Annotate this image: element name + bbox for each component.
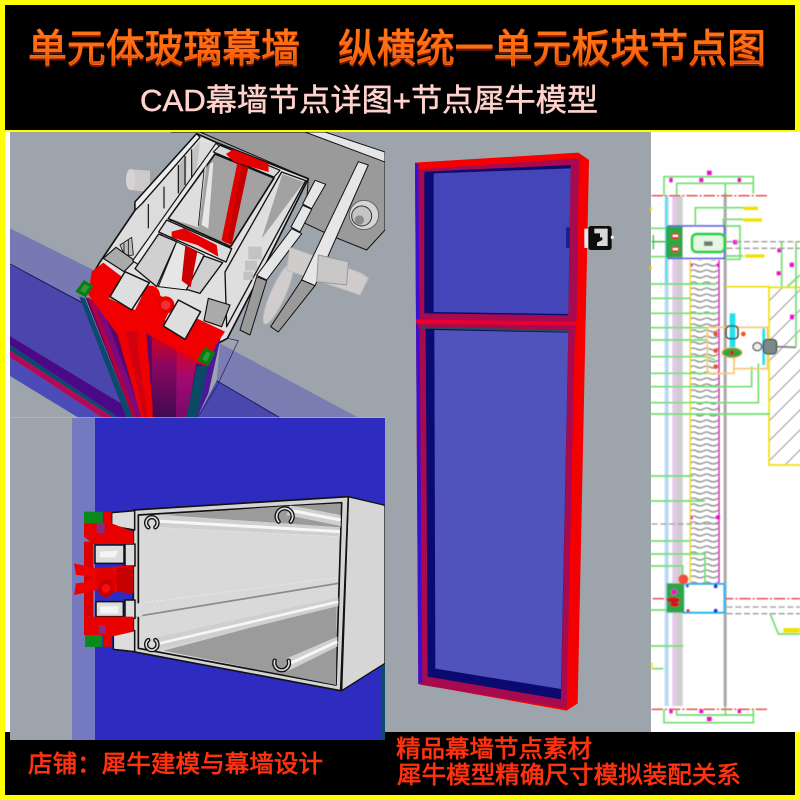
red thermal break T pieces <box>172 149 269 287</box>
wall hatch <box>726 287 800 465</box>
tagline line one: 精品幕墙节点素材 <box>396 736 592 763</box>
upper rails <box>157 505 341 537</box>
title: 纵横统一单元板块节点图 <box>338 30 766 73</box>
translucent mullion edge <box>197 338 238 419</box>
header banner <box>5 5 795 130</box>
icon: left bolt <box>126 169 150 192</box>
icon: bracket at frame edge <box>566 226 614 250</box>
panel: front 3D mullion perspective <box>10 418 385 740</box>
outer left wall face <box>135 134 200 210</box>
back plate <box>171 132 385 250</box>
upper strip above cell <box>213 145 280 177</box>
middle cross bar <box>159 220 232 262</box>
bottom node section <box>667 574 724 613</box>
upper chamber <box>168 154 274 247</box>
aluminium mullion profile <box>93 134 308 360</box>
transom <box>416 319 576 333</box>
mullion fan below section <box>79 297 222 419</box>
screw ports <box>146 508 293 670</box>
right chamber <box>225 172 306 327</box>
title <box>28 28 766 73</box>
title: 单元体玻璃幕墙 <box>28 30 300 73</box>
top node section <box>652 226 725 258</box>
insulation section <box>691 260 719 583</box>
right pressure plates and washers <box>240 162 368 335</box>
yellow dimension tags <box>650 207 800 669</box>
title: 纵横统一单元板块节点图 <box>338 28 766 71</box>
thin divider strip <box>10 417 385 418</box>
lower glass pane <box>426 329 568 699</box>
icon: anchor nut <box>349 200 379 230</box>
lower rails <box>157 597 338 672</box>
vertical glass and frame lines <box>665 193 727 707</box>
subtitle: CAD幕墙节点详图+节点犀牛模型 <box>140 83 598 118</box>
title: 单元体玻璃幕墙 <box>28 28 300 71</box>
aluminium box section <box>133 497 385 691</box>
diagonal wall <box>133 143 220 266</box>
glass bands <box>10 228 360 419</box>
red gasket section <box>74 512 133 647</box>
strut highlights <box>100 551 118 613</box>
upper glass pane <box>424 165 571 315</box>
panel: angled 3D mullion section <box>10 132 385 419</box>
tagline line two: 犀牛模型精确尺寸模拟装配关系 <box>397 762 741 789</box>
dimension markers <box>669 171 794 721</box>
left chamber walls <box>103 141 200 272</box>
panel: 3D curtain wall unit elevation <box>385 132 651 732</box>
green corner gaskets <box>75 280 215 366</box>
green corner gaskets <box>84 512 103 647</box>
thermal chambers at section face <box>110 272 201 339</box>
curtain wall frame <box>415 153 589 711</box>
central seam <box>135 577 338 617</box>
footer banner <box>5 736 741 795</box>
white thermal struts <box>95 511 135 652</box>
panel: CAD node drawing <box>650 132 800 732</box>
shop name: 店铺：犀牛建模与幕墙设计 <box>28 751 323 778</box>
dimension lines <box>650 177 800 723</box>
lower chambers <box>135 234 230 327</box>
bracket assembly <box>707 313 796 373</box>
profile outline <box>93 134 308 360</box>
red gaskets at section face <box>88 263 225 367</box>
dashed axis lines <box>652 196 800 709</box>
